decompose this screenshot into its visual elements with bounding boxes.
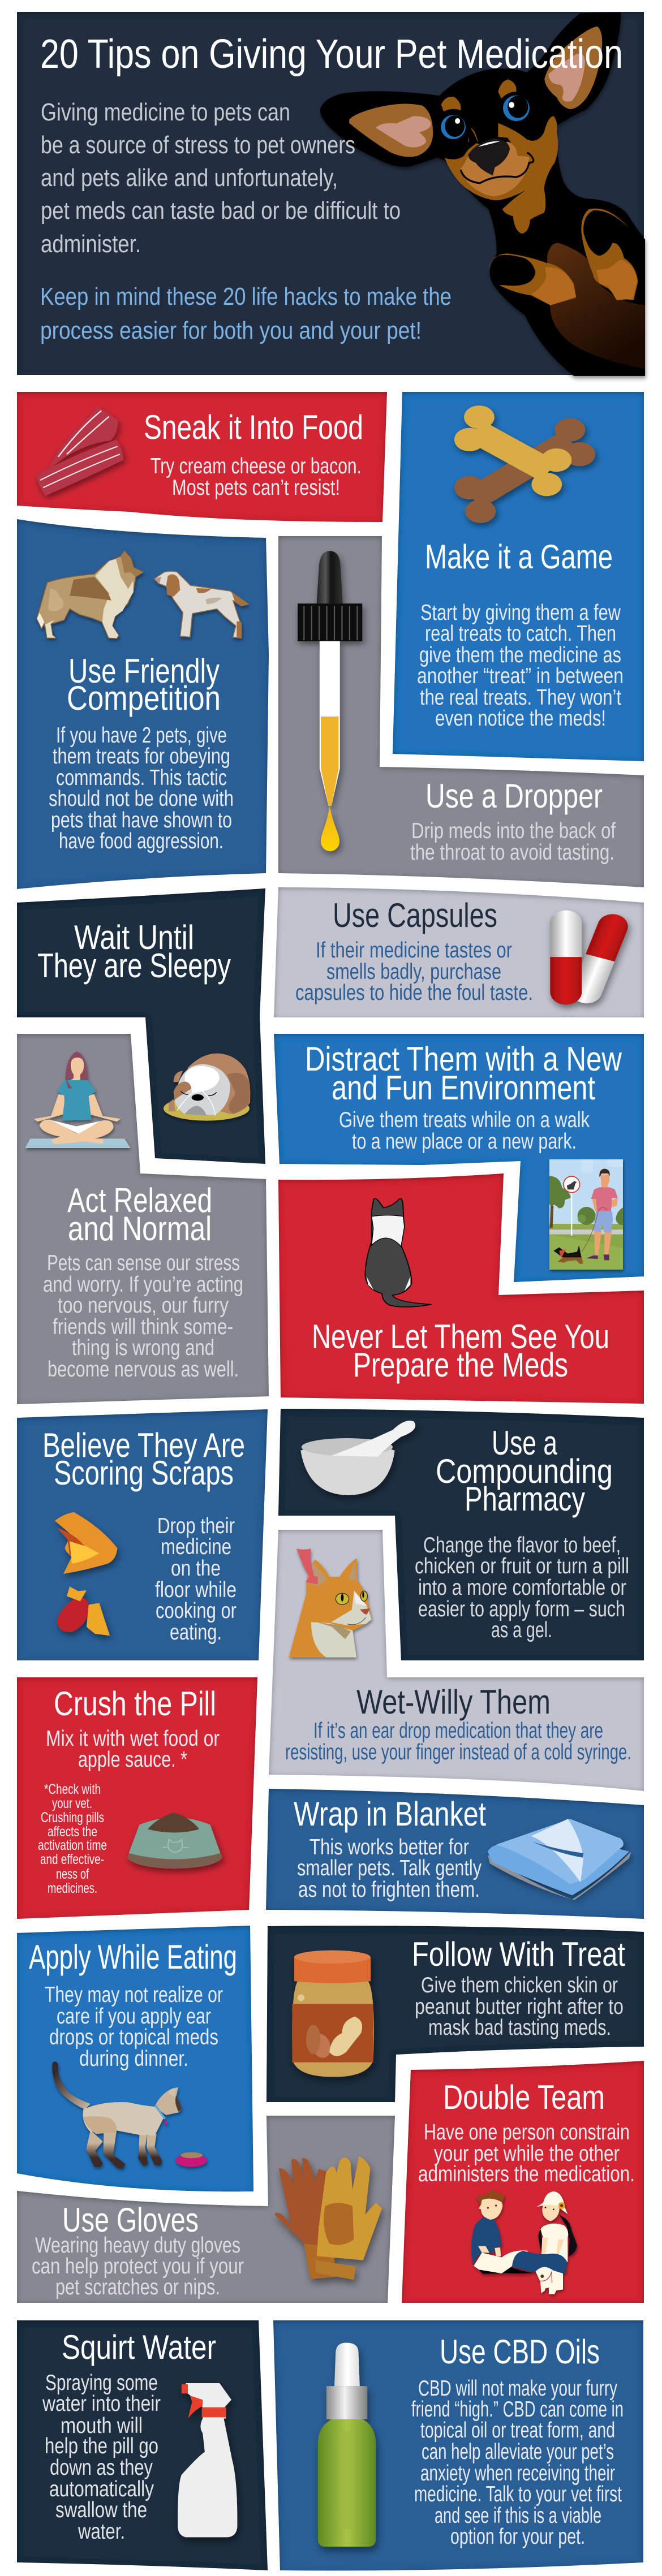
icon: spray bottle	[178, 2383, 237, 2537]
panel: wet-willy them	[269, 1530, 644, 1791]
body text: If you have 2 pets, give	[56, 723, 227, 748]
body text: capsules to hide the foul taste.	[295, 981, 533, 1005]
footnote: your vet.	[52, 1796, 92, 1811]
body text: your pet while the other	[434, 2142, 620, 2166]
call to action text: process easier for both you and your pet!	[40, 317, 422, 344]
body text: option for your pet.	[450, 2525, 585, 2549]
footnote: medicines.	[48, 1880, 97, 1896]
icon: cat from behind	[365, 1198, 432, 1307]
heading: Sneak it Into Food	[144, 408, 363, 446]
body text: peanut butter right after to	[415, 1995, 624, 2019]
body text: smells badly, purchase	[326, 960, 501, 984]
heading: Use CBD Oils	[440, 2333, 600, 2371]
body text: thing is wrong and	[72, 1336, 214, 1360]
icon: work gloves	[274, 2156, 382, 2280]
body text: as not to frighten them.	[298, 1878, 480, 1902]
heading: Use Gloves	[62, 2201, 199, 2239]
heading: Wrap in Blanket	[294, 1795, 486, 1833]
icon: two people with puppy	[471, 2190, 577, 2294]
intro text	[41, 98, 401, 258]
call to action text: Keep in mind these 20 life hacks to make the	[40, 283, 452, 310]
intro text: be a source of stress to pet owners	[41, 131, 355, 159]
body text: pet scratches or nips.	[55, 2275, 220, 2299]
heading: Use Capsules	[333, 896, 497, 934]
body text: floor while	[155, 1578, 237, 1602]
icon: orange cat with arrow to ear	[289, 1548, 372, 1658]
footnote: affects the	[48, 1824, 97, 1840]
body text	[285, 1719, 631, 1764]
body text	[297, 1835, 482, 1902]
panel: hero header	[17, 12, 645, 376]
body text: smaller pets. Talk gently	[297, 1856, 482, 1880]
body text: commands. This tactic	[56, 766, 227, 790]
body text	[155, 1514, 237, 1645]
body text	[43, 1251, 243, 1382]
body text: should not be done with	[49, 787, 234, 811]
icon: food bowl	[127, 1813, 222, 1869]
heading: Believe They Are	[42, 1426, 245, 1464]
body text: during dinner.	[79, 2047, 188, 2071]
body text	[295, 938, 533, 1005]
panel: wait until they are sleepy	[17, 888, 265, 1164]
intro text: administer.	[41, 230, 141, 258]
body text: even notice the meds!	[435, 706, 606, 731]
heading	[436, 1424, 613, 1518]
body text: can help protect you if your	[32, 2254, 244, 2279]
heading: Pharmacy	[465, 1480, 585, 1518]
body text: become nervous as well.	[48, 1357, 239, 1382]
body text	[411, 2376, 624, 2549]
body text	[32, 2233, 244, 2299]
heading: Scoring Scraps	[54, 1454, 234, 1492]
illustration: dachshund	[320, 12, 645, 376]
body text: Give them treats while on a walk	[339, 1108, 590, 1132]
body text: water.	[78, 2519, 125, 2544]
body text: medicine	[161, 1535, 231, 1559]
body text: eating.	[170, 1620, 222, 1645]
body text	[49, 723, 234, 853]
body text: have food aggression.	[59, 829, 223, 853]
body text: Spraying some	[45, 2371, 158, 2395]
heading: Wait Until	[74, 918, 194, 956]
body text: If their medicine tastes or	[316, 938, 512, 963]
body text: swallow the	[55, 2498, 147, 2522]
heading: Use a Dropper	[425, 777, 603, 815]
intro text: and pets alike and unfortunately,	[41, 164, 338, 192]
heading: Compounding	[436, 1452, 613, 1490]
body text: as a gel.	[491, 1618, 552, 1642]
panel: use a compounding pharmacy	[278, 1409, 644, 1660]
panel: wrap in blanket	[266, 1789, 644, 1919]
panel: use gloves	[17, 2116, 395, 2303]
heading: Squirt Water	[62, 2328, 216, 2366]
heading	[305, 1040, 622, 1107]
footnote: and effective-	[40, 1852, 104, 1867]
call to action text	[40, 283, 452, 344]
body text	[151, 454, 362, 500]
body text	[46, 1727, 220, 1772]
heading: Apply While Eating	[29, 1938, 237, 1976]
heading: Act Relaxed	[67, 1181, 212, 1219]
body text: mouth will	[61, 2414, 143, 2438]
heading: Wet-Willy Them	[356, 1683, 551, 1721]
body text	[410, 819, 616, 865]
heading	[312, 1318, 609, 1384]
panel: crush the pill	[17, 1677, 257, 1919]
intro text: Giving medicine to pets can	[41, 98, 290, 126]
icon: two dogs	[37, 551, 248, 638]
body text: to a new place or a new park.	[352, 1129, 577, 1154]
heading	[67, 652, 221, 717]
heading: They are Sleepy	[37, 947, 231, 985]
heading	[42, 1426, 245, 1492]
body text: real treats to catch. Then	[425, 622, 616, 646]
intro text: pet meds can taste bad or be difficult to	[41, 197, 401, 225]
icon: bones	[454, 405, 595, 523]
body text: down as they	[50, 2456, 153, 2480]
body text: Drip meds into the back of	[411, 819, 616, 843]
heading: Double Team	[443, 2078, 605, 2116]
body text: mask bad tasting meds.	[428, 2016, 611, 2040]
icon: meditating woman	[25, 1051, 131, 1148]
panel: distract them	[274, 1034, 644, 1282]
icon: mortar and pestle	[300, 1421, 415, 1495]
body text: water into their	[42, 2392, 161, 2416]
body text	[42, 2371, 161, 2544]
panel: sneak it into food	[17, 392, 387, 522]
panel: use friendly competition	[17, 519, 269, 889]
heading	[67, 1181, 212, 1248]
heading: and Fun Environment	[332, 1069, 595, 1107]
body text: Wearing heavy duty gloves	[35, 2233, 240, 2258]
body text: the throat to avoid tasting.	[410, 840, 614, 865]
icon: cbd bottle	[318, 2342, 376, 2547]
body text	[417, 601, 624, 731]
icon: capsules	[550, 911, 632, 1007]
panel: never let them see you prepare the meds	[278, 1173, 644, 1404]
panel: use a dropper	[278, 536, 644, 887]
heading: and Normal	[68, 1210, 212, 1248]
body text: Mix it with wet food or	[46, 1727, 220, 1751]
footnote: activation time	[38, 1837, 107, 1853]
body text	[45, 1983, 223, 2071]
body text: Pets can sense our stress	[47, 1251, 240, 1275]
icon: food scraps	[55, 1512, 117, 1636]
body text: and worry. If you’re acting	[43, 1272, 243, 1297]
icon: man walking dog in park	[549, 1159, 623, 1270]
heading: Competition	[67, 679, 221, 717]
body text: cooking or	[156, 1599, 237, 1623]
panel: double team	[402, 2061, 644, 2303]
panel: squirt water	[17, 2320, 268, 2570]
heading: Prepare the Meds	[353, 1346, 568, 1384]
heading: Use Friendly	[68, 652, 220, 690]
icon: bacon	[36, 407, 123, 496]
panel: believe they are scoring scraps	[17, 1409, 268, 1660]
body text	[415, 1533, 629, 1642]
footnote: ness of	[56, 1866, 89, 1882]
heading	[37, 918, 231, 985]
body text: pets that have shown to	[51, 808, 232, 832]
heading: Make it a Game	[425, 538, 613, 576]
panel: use cbd oils	[273, 2320, 643, 2570]
icon: sleeping bulldog	[164, 1054, 250, 1121]
body text	[415, 1973, 624, 2040]
icon: peanut butter jar	[292, 1951, 374, 2077]
body text: help the pill go	[45, 2434, 158, 2458]
heading: Use a	[492, 1424, 557, 1462]
body text: them treats for obeying	[53, 744, 230, 769]
icon: dropper	[298, 551, 362, 851]
body text	[339, 1108, 590, 1154]
heading: Crush the Pill	[54, 1685, 216, 1723]
icon: folded blanket	[488, 1819, 631, 1900]
body text: Most pets can’t resist!	[172, 476, 340, 500]
body text: too nervous, our furry	[58, 1293, 229, 1318]
panel: use capsules	[274, 887, 644, 1017]
body text: care if you apply ear	[57, 2004, 211, 2029]
body text: They may not realize or	[45, 1983, 223, 2007]
body text: on the	[171, 1556, 221, 1581]
body text: This works better for	[309, 1835, 469, 1859]
panel: apply while eating	[17, 1926, 253, 2191]
body text: Try cream cheese or bacon.	[151, 454, 362, 478]
body text: friends will think some-	[53, 1315, 233, 1339]
panel: act relaxed and normal	[17, 1034, 269, 1404]
footnote: Crushing pills	[41, 1810, 104, 1826]
body text: drops or topical meds	[49, 2025, 218, 2049]
panel: follow with treat	[266, 1926, 644, 2102]
body text: Drop their	[157, 1514, 235, 1538]
footnote	[38, 1781, 107, 1896]
icon: siamese cat and bowl	[52, 2061, 207, 2169]
footnote: *Check with	[44, 1781, 101, 1797]
body text: automatically	[49, 2477, 154, 2501]
body text	[418, 2120, 635, 2186]
body text: apple sauce. *	[78, 1747, 187, 1772]
panel: make it a game	[393, 392, 644, 761]
